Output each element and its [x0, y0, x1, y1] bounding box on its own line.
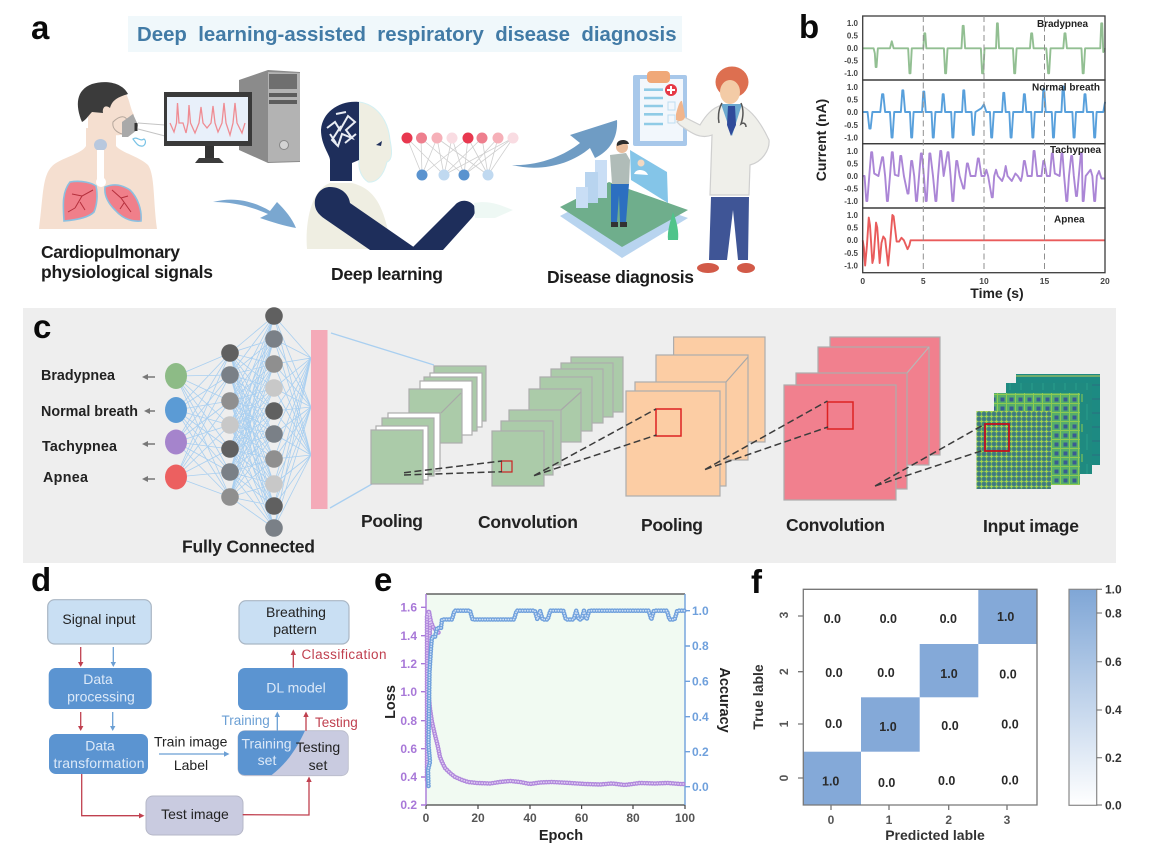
left tick labels: 0.8: [400, 714, 417, 728]
left tick labels: 1.2: [400, 657, 417, 671]
matrix values: 0.0: [941, 719, 959, 733]
y tick labels: 1: [777, 720, 791, 727]
feature maps: second convolution stack: [784, 337, 940, 500]
y tick labels: 0.5: [847, 224, 859, 232]
panel f: confusion matrix: [750, 563, 1122, 843]
y tick labels: 1.0: [847, 83, 859, 92]
feature maps: first pooling stack: [371, 366, 486, 484]
x tick labels: 40: [523, 811, 537, 825]
box: training and testing sets: Training: [241, 735, 292, 751]
matrix values: [822, 610, 1019, 790]
caption: cardiopulmonary physiological signals: physiological signals: [41, 262, 213, 282]
signal: tachypnea: [863, 151, 1105, 201]
box: data processing: processing: [67, 688, 135, 704]
box: test image: [146, 796, 243, 835]
fully connected layer links: [176, 316, 311, 528]
right tick labels: 0.4: [692, 710, 709, 724]
x tick labels: 100: [675, 811, 695, 825]
left tick labels: 1.0: [400, 685, 417, 699]
output labels: [41, 368, 138, 486]
left tick labels: 0.2: [400, 798, 417, 812]
y tick labels: -0.5: [844, 121, 859, 130]
x tick labels: 20: [471, 811, 485, 825]
blue arrows: training data path: [110, 647, 280, 757]
output arrows: [142, 374, 155, 482]
plot area: [426, 594, 685, 805]
signal: bradypnea: [863, 23, 1105, 73]
time gridlines: [923, 16, 1044, 272]
feature maps: first convolution stack: [492, 357, 623, 486]
signal: normal breath: [863, 86, 1105, 138]
x tick labels: 0: [828, 813, 835, 827]
x tick labels: 20: [1100, 276, 1110, 286]
panel label e: e: [374, 561, 392, 598]
matrix values: 0.0: [825, 717, 842, 731]
signal names: Bradypnea: [1037, 19, 1088, 30]
layer captions: [182, 511, 1079, 556]
box: signal input: Signal input: [62, 611, 136, 627]
y tick labels: 0: [777, 774, 791, 781]
arrow labels: Classification: [302, 647, 386, 662]
box: DL model: [238, 668, 348, 710]
layer captions: Pooling: [641, 515, 703, 535]
x tick labels: [828, 813, 1011, 827]
caption: cardiopulmonary physiological signals: Cardiopulmonary: [41, 242, 180, 262]
colour bar: [1069, 582, 1122, 812]
matrix values: 0.0: [825, 666, 843, 680]
network diagram: red and blue nodes: [402, 132, 518, 180]
matrix values: 0.0: [880, 612, 897, 626]
caption: disease diagnosis: Disease diagnosis: [547, 267, 694, 287]
matrix values: 1.0: [940, 667, 958, 681]
y tick labels: -0.5: [844, 184, 859, 194]
y tick labels: 0.0: [847, 236, 859, 245]
matrix values: 1.0: [822, 774, 839, 788]
x tick labels: 10: [979, 276, 989, 286]
matrix values: 1.0: [879, 720, 897, 734]
layer captions: Convolution: [786, 515, 885, 535]
hidden layer 2 nodes: [265, 307, 283, 537]
box: data processing: Data: [83, 671, 113, 687]
panel label d: d: [31, 561, 51, 598]
x tick labels: [860, 276, 1110, 286]
y tick labels: -1.0: [844, 69, 859, 78]
y tick labels: -0.5: [844, 249, 859, 258]
signal: apnea: [863, 215, 1105, 266]
box: breathing pattern: [239, 601, 349, 644]
layer captions: Input image: [983, 516, 1079, 536]
arrow labels: Train image: [154, 734, 228, 750]
box: data processing: [49, 668, 152, 709]
output nodes: [165, 363, 187, 490]
right tick labels: 0.8: [692, 639, 709, 653]
caption: cardiopulmonary physiological signals: [41, 242, 213, 282]
right tick labels: 0.6: [692, 674, 709, 688]
y tick labels: 1.0: [847, 211, 859, 220]
loss axis title: Loss: [383, 685, 399, 719]
y tick labels: -1.0: [844, 262, 859, 270]
y tick labels: 0.0: [847, 172, 859, 181]
box: test image: Test image: [161, 806, 229, 822]
colour bar: 0.0: [1105, 798, 1122, 812]
left tick labels: 0.6: [400, 742, 417, 756]
title: Deep learning-assisted respiratory disease diagnosis: [137, 24, 677, 46]
y tick labels: 0.5: [847, 96, 859, 104]
right tick labels: 1.0: [692, 604, 709, 618]
panel d: processing flowchart: [31, 561, 386, 835]
matrix values: 0.0: [999, 668, 1017, 682]
accuracy axis title: Accuracy: [716, 667, 732, 733]
y tick labels: -1.0: [844, 134, 859, 142]
projection lines from flatten bar: [330, 333, 434, 508]
y axis title: True lable: [750, 664, 766, 730]
panel label b: b: [799, 8, 819, 45]
arrow labels: [154, 647, 386, 773]
stacked axes frames: [863, 16, 1105, 273]
box: signal input: [48, 600, 151, 644]
box: DL model: DL model: [266, 680, 326, 696]
x tick labels: 60: [575, 811, 589, 825]
left tick labels: 1.4: [400, 629, 417, 643]
feature maps: second pooling stack: [626, 337, 765, 496]
plot top and bottom axes: [426, 594, 685, 809]
colour bar: 0.8: [1105, 606, 1122, 620]
x tick labels: 5: [921, 276, 926, 286]
y tick labels: -0.5: [844, 56, 859, 66]
box: data transformation: Data: [85, 738, 115, 754]
y tick labels: 0.5: [847, 160, 859, 168]
matrix values: 0.0: [938, 774, 955, 788]
panel c: CNN architecture: [23, 307, 1116, 563]
panel label f: f: [751, 563, 763, 600]
illustration: robot with neural network brain: [307, 102, 513, 250]
signal names: Apnea: [1054, 214, 1085, 226]
box: training and testing sets: Testing: [296, 739, 340, 755]
colour bar: 0.4: [1105, 703, 1122, 717]
panel e: loss and accuracy curves: [374, 561, 732, 844]
matrix values: 0.0: [1001, 774, 1019, 788]
x axis title: Time (s): [970, 285, 1024, 301]
box: training and testing sets: set: [258, 752, 276, 768]
arrow labels: Testing: [315, 715, 358, 730]
matrix values: 0.0: [824, 612, 841, 626]
layer captions: Pooling: [361, 511, 423, 531]
layer captions: Fully Connected: [182, 536, 315, 556]
x tick labels: 3: [1004, 813, 1011, 827]
x tick labels: 80: [626, 811, 640, 825]
arrow: deep learning to diagnosis: [512, 120, 617, 168]
y tick labels: 1.0: [847, 147, 859, 156]
caption: deep learning: Deep learning: [331, 264, 443, 284]
output labels: Tachypnea: [42, 439, 118, 455]
signal names: Normal breath: [1032, 82, 1100, 94]
x axis title: Predicted lable: [885, 827, 985, 843]
panel background: [23, 308, 1116, 563]
y tick labels: 0.5: [847, 32, 859, 40]
illustration: monitor with waveform and computer tower: [164, 70, 300, 163]
dashed projections between layers: [404, 401, 985, 486]
right tick labels: [692, 604, 709, 794]
y tick labels: -1.0: [844, 197, 859, 206]
y tick labels: 1.0: [847, 19, 859, 28]
matrix cells: [803, 589, 1037, 805]
right tick labels: 0.2: [692, 745, 709, 759]
x tick labels: 0: [860, 276, 865, 286]
signal names: [1032, 19, 1101, 226]
output labels: Apnea: [43, 470, 89, 486]
left tick labels: 0.4: [400, 770, 417, 784]
x tick labels: 0: [423, 811, 430, 825]
arrow labels: Training: [222, 713, 270, 728]
matrix values: 0.0: [1001, 718, 1019, 732]
illustration: isometric platform with patient and screen: [560, 140, 688, 258]
arrow: signals to deep learning: [213, 200, 296, 228]
arrow labels: Label: [174, 757, 208, 773]
loss curve: [427, 611, 685, 785]
x tick labels: 1: [886, 813, 893, 827]
y tick labels: 2: [777, 668, 791, 675]
x tick labels: 15: [1040, 276, 1049, 286]
box: breathing pattern: Breathing: [266, 604, 326, 620]
box: training and testing sets: [238, 731, 348, 776]
input image stack: [976, 374, 1100, 489]
colour bar: 1.0: [1105, 582, 1122, 596]
flatten bar: [311, 330, 328, 509]
panel a: deep learning-assisted diagnosis workflow: [31, 9, 769, 287]
y axis title: Current (nA): [813, 99, 829, 181]
illustration: patient with lungs and breathing mask: [39, 82, 165, 229]
box: data transformation: [49, 734, 148, 774]
box: breathing pattern: pattern: [273, 621, 317, 637]
signal names: Tachypnea: [1050, 145, 1101, 156]
matrix values: 0.0: [877, 666, 895, 680]
x tick labels: [423, 811, 695, 825]
panel label a: a: [31, 9, 50, 46]
accuracy curve: [428, 611, 685, 786]
illustration: doctor pointing at clipboard: [633, 66, 769, 273]
output labels: Bradypnea: [41, 368, 116, 384]
matrix values: 0.0: [940, 612, 957, 626]
y tick labels: 3: [777, 611, 791, 618]
left axis: [421, 594, 426, 805]
y tick labels: 0.0: [847, 44, 859, 53]
x axis title: Epoch: [539, 828, 583, 844]
hidden layer 1 nodes: [221, 344, 239, 506]
right tick labels: 0.0: [692, 780, 709, 794]
box: data transformation: transformation: [54, 755, 144, 771]
box: training and testing sets: set: [309, 757, 327, 773]
x tick labels: 2: [945, 813, 952, 827]
left tick labels: [400, 600, 417, 812]
panel label c: c: [33, 308, 51, 345]
title: [128, 16, 682, 52]
matrix values: 0.0: [878, 776, 895, 790]
left tick labels: 1.6: [400, 600, 417, 614]
layer captions: Convolution: [478, 512, 578, 532]
right axis: [685, 594, 690, 805]
panel b: current signals over time: [799, 8, 1110, 301]
matrix frame and ticks: [798, 589, 1037, 810]
y tick labels: [844, 19, 859, 270]
colour bar: 0.2: [1105, 751, 1122, 765]
y tick labels: 0.0: [847, 108, 859, 117]
matrix values: 1.0: [997, 610, 1014, 624]
output labels: Normal breath: [41, 404, 138, 420]
y tick labels: [777, 611, 791, 781]
colour bar: 0.6: [1105, 655, 1122, 669]
red arrows: test data path: [78, 647, 312, 818]
